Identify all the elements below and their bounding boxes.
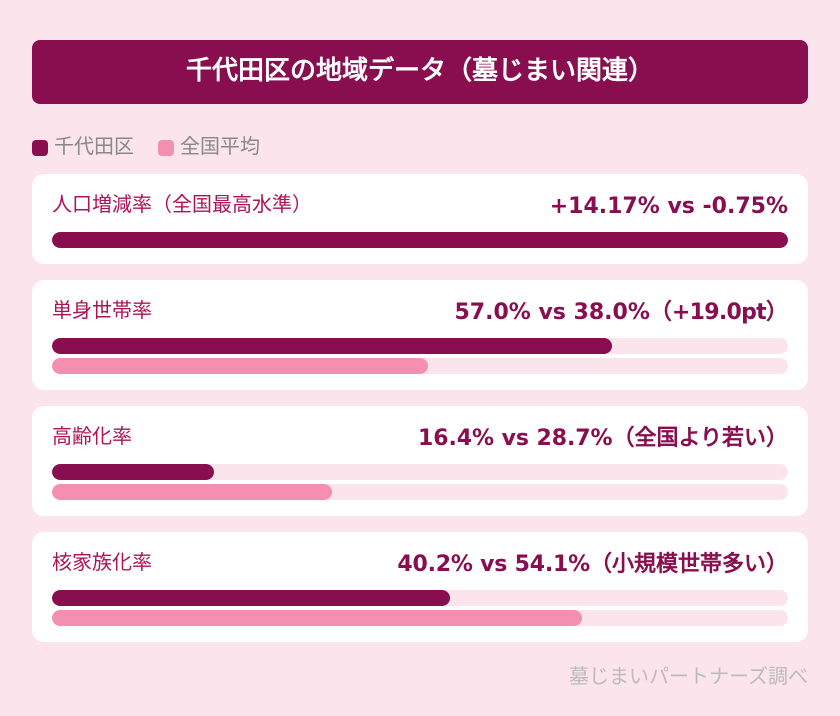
title banner: [32, 40, 808, 104]
panel: aging rate: [32, 406, 808, 516]
panel: aging rate: 高齢化率: [52, 424, 132, 448]
legend: [32, 134, 260, 158]
panel: nuclear family rate: 核家族化率: [52, 550, 152, 574]
title banner: 千代田区の地域データ（墓じまい関連）: [186, 56, 654, 86]
panel: population change rate: [32, 174, 808, 264]
panel: single household rate: 57.0% vs 38.0%（+19.0pt）: [454, 300, 788, 325]
panel: population change rate: +14.17% vs -0.75%: [550, 194, 788, 219]
panel: single household rate: 単身世帯率: [52, 298, 152, 322]
legend: 全国平均: [180, 134, 260, 158]
source note: 墓じまいパートナーズ調べ: [569, 664, 808, 688]
legend: 千代田区: [54, 134, 134, 158]
panel: population change rate: 人口増減率（全国最高水準）: [52, 192, 312, 216]
panel: nuclear family rate: [32, 532, 808, 642]
panel: single household rate: [32, 280, 808, 390]
panel: nuclear family rate: 40.2% vs 54.1%（小規模世帯多い）: [397, 552, 788, 577]
panel: aging rate: 16.4% vs 28.7%（全国より若い）: [418, 426, 788, 451]
